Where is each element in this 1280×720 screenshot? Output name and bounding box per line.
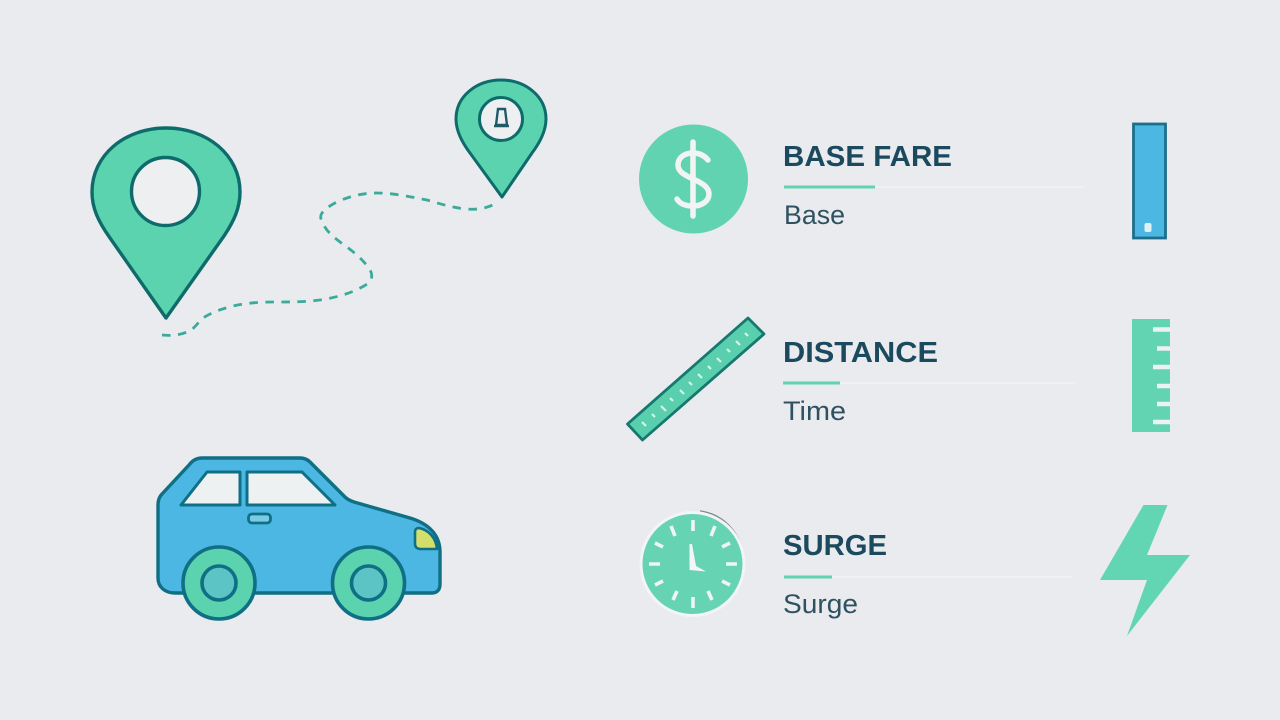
car door handle xyxy=(248,514,270,523)
icon: small location pin with bell xyxy=(456,80,546,197)
heading: base fare: BASE FARE xyxy=(783,141,952,173)
icon: large location pin xyxy=(92,128,240,318)
icon: blue bar xyxy=(1134,124,1166,238)
panel: distance row xyxy=(628,318,1170,440)
icon: clock xyxy=(641,511,744,616)
distance divider xyxy=(783,382,1076,384)
icon: dollar coin xyxy=(639,124,748,234)
car windows xyxy=(181,472,335,505)
panel: base fare row xyxy=(639,124,1166,238)
dashed route xyxy=(162,193,495,335)
panel: surge row xyxy=(641,505,1190,636)
clock hand xyxy=(690,544,706,572)
icon: diagonal ruler xyxy=(628,318,764,440)
base fare divider xyxy=(784,186,1084,188)
icon: vertical ruler xyxy=(1132,319,1170,432)
car headlight xyxy=(415,528,437,549)
heading: distance: DISTANCE xyxy=(783,337,938,369)
heading: surge: SURGE xyxy=(783,530,887,562)
panel: route map xyxy=(92,80,546,335)
rear wheel xyxy=(183,547,255,619)
front wheel xyxy=(332,547,404,619)
label: base: Base xyxy=(784,200,845,230)
surge divider xyxy=(784,576,1072,578)
icon: blue car xyxy=(158,458,440,619)
label: surge: Surge xyxy=(783,589,858,619)
icon: lightning bolt xyxy=(1100,505,1190,636)
label: time: Time xyxy=(783,396,846,426)
